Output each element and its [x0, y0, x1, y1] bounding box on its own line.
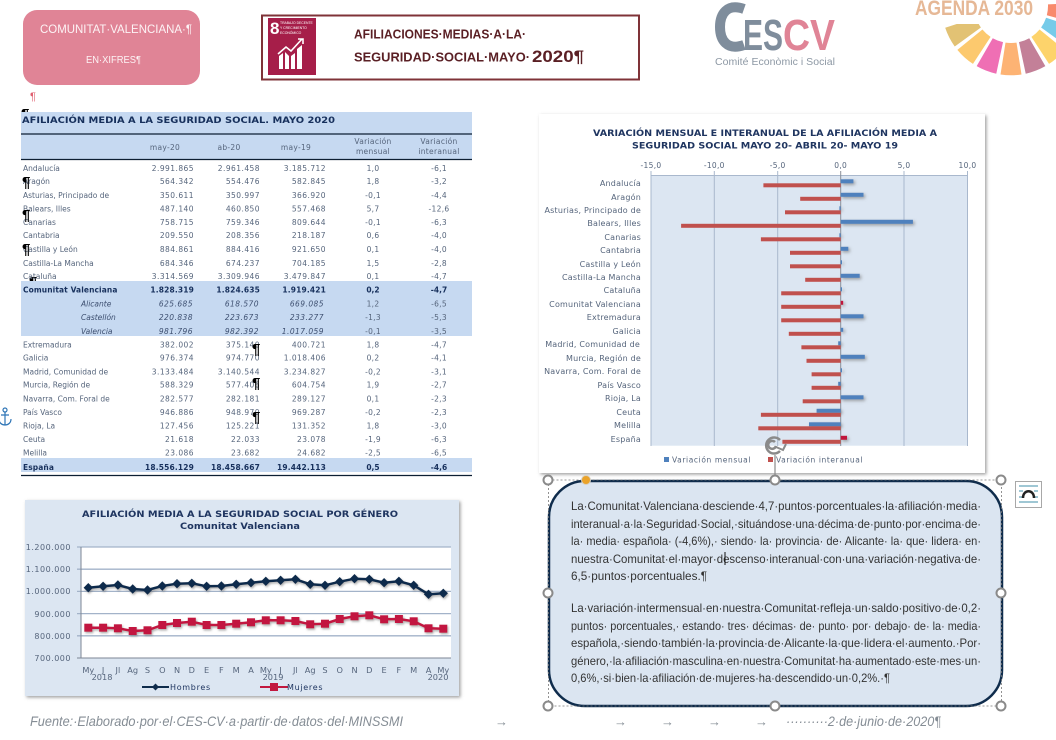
table rows: 24.682 [297, 448, 326, 458]
category labels: España [611, 435, 641, 444]
table rows: 218.187 [292, 231, 326, 240]
table header: interanual [418, 147, 460, 156]
table rows: 704.185 [292, 259, 326, 268]
formatting marks: ¶ [252, 375, 260, 392]
table rows: -0,1 [365, 218, 381, 227]
table rows: 557.468 [292, 204, 326, 214]
series: Hombres [88, 579, 443, 594]
footer date: → [614, 714, 627, 729]
title text: AFILIACIONES·MEDIAS·A·LA· [354, 26, 526, 42]
table rows: 884.416 [226, 245, 260, 254]
table rows: 208.356 [226, 231, 260, 240]
table rows: Navarra, Com. Foral de [23, 394, 110, 404]
table title: AFILIACIÓN MEDIA A LA SEGURIDAD SOCIAL. MAYO 2020 [22, 114, 335, 126]
icon: SDG 8 decent work: TRABAJO DECENTE [280, 21, 314, 25]
selection handles [544, 455, 1006, 710]
table rows: -6,1 [431, 164, 447, 173]
table rows: 884.861 [160, 245, 194, 254]
table rows: 460.850 [226, 204, 260, 214]
table rows: -1,9 [365, 435, 381, 444]
table rows: 0,2 [367, 354, 379, 362]
table rows: 3.140.544 [218, 368, 260, 376]
logo: CESCV [715, 7, 836, 68]
table rows: 131.352 [292, 422, 326, 430]
table rows: 0,5 [366, 463, 380, 472]
x axis labels: F [219, 665, 224, 675]
table rows: -4,1 [431, 354, 447, 362]
table rows: Madrid, Comunidad de [23, 368, 109, 376]
formatting marks under the table [21, 106, 37, 291]
series: Mujeres [88, 615, 443, 631]
legend: Hombres [170, 683, 211, 692]
table header: ab-20 [217, 143, 241, 152]
category labels: Cataluña [604, 286, 641, 295]
table rows: 684.346 [160, 259, 194, 268]
x axis labels: Jl [115, 665, 120, 675]
footer date: → [661, 714, 674, 729]
icon: anchor [0, 408, 11, 425]
icon: SDG 8 decent work: 8 [270, 19, 279, 38]
table rows: 23.078 [297, 435, 326, 444]
table rows: -3,0 [431, 422, 447, 430]
title text: SEGURIDAD·SOCIAL·MAYO· [354, 50, 530, 64]
table rows: Valencia [81, 327, 113, 336]
y axis labels: 900.000 [34, 610, 71, 619]
x axis labels: My [82, 665, 94, 675]
icon: SDG 8 decent work: ECONÓMICO [280, 30, 302, 35]
x axis labels: Jl [292, 665, 298, 675]
table rows: Castilla-La Mancha [23, 259, 94, 268]
legend [664, 456, 863, 464]
table rows: Asturias, Principado de [23, 191, 110, 200]
x axis labels: -5,0 [770, 161, 786, 170]
x axis labels: M [410, 665, 417, 675]
x axis labels: D [366, 665, 372, 675]
table rows: 1.017.059 [282, 327, 324, 336]
x axis labels: 2019 [263, 672, 283, 682]
footer date: → [755, 714, 768, 729]
table rows: 1,2 [367, 300, 379, 308]
table rows: 382.002 [160, 340, 194, 350]
table rows: 3.234.827 [284, 368, 326, 376]
x axis labels: J [101, 665, 104, 675]
table rows: -6,3 [431, 435, 447, 444]
table rows: 0,2 [366, 286, 380, 294]
paragraph 1: La·Comunitat·Valenciana·desciende·4,7·puntos·porcentuales·la·afiliación·media· [571, 499, 981, 513]
table header: may-20 [150, 143, 180, 152]
line chart: afiliación por género [25, 500, 459, 696]
table rows: 282.577 [160, 394, 194, 404]
table rows: Balears, Illes [23, 204, 71, 214]
table rows: -2,8 [431, 259, 447, 268]
category labels: Comunitat Valenciana [549, 300, 641, 309]
table rows: 23.086 [165, 448, 194, 458]
icon: rotate handle [766, 438, 786, 453]
paragraph 2: española,·siendo·también·la·provincia·de·Alicante·la·que·lidera·el·aumento.·Por· [571, 636, 981, 650]
table rows: -12,6 [429, 204, 449, 214]
x axis labels: J [278, 665, 282, 675]
table rows: Cataluña [23, 272, 57, 281]
badge: Comunitat Valenciana en xifres: COMUNITAT·VALENCIANA·¶ [40, 24, 192, 36]
chart title: Comunitat Valenciana [180, 522, 300, 532]
category labels: Madrid, Comunidad de [545, 340, 640, 349]
legend: Variación interanual [776, 456, 863, 464]
table rows: -4,7 [431, 272, 447, 281]
table rows: Extremadura [23, 340, 72, 350]
table rows: -3,1 [431, 368, 447, 376]
table rows: 289.127 [292, 394, 326, 404]
table rows: 0,1 [367, 394, 379, 404]
table rows: 18.458.667 [211, 463, 260, 472]
category labels: Cantabria [600, 246, 641, 255]
table rows: 577.406 [226, 380, 260, 390]
table rows: 554.476 [226, 177, 260, 186]
x axis labels: A [426, 665, 432, 675]
x axis labels: -10,0 [704, 161, 725, 170]
table rows: 3.185.712 [284, 164, 326, 173]
table rows: -1,3 [365, 313, 381, 322]
table rows: -0,1 [365, 327, 381, 336]
footer date: → [708, 714, 721, 729]
table rows: -4,0 [431, 245, 447, 254]
table rows: 588.329 [160, 380, 194, 390]
x axis labels: 5,0 [898, 161, 910, 170]
table rows: 1,8 [367, 177, 379, 186]
category labels: Extremadura [587, 313, 641, 322]
table rows: 1,0 [367, 164, 379, 173]
table rows: -2,3 [431, 394, 447, 404]
table rows: 366.920 [292, 191, 326, 200]
category labels [544, 179, 641, 444]
table rows: Melilla [23, 448, 47, 458]
table rows: 976.374 [160, 354, 194, 362]
table rows: 3.314.569 [152, 272, 194, 281]
x axis labels: E [204, 665, 209, 675]
table rows: 0,1 [367, 272, 379, 281]
x axis labels: F [397, 665, 402, 675]
x axis labels: E [382, 665, 387, 675]
table rows: 21.618 [165, 435, 194, 444]
table rows: 209.550 [160, 231, 194, 240]
table rows: 1,5 [367, 259, 379, 268]
table rows: Rioja, La [23, 422, 55, 430]
paragraph 1: la· media· española· (-4,6%),· siendo· la· provincia· de· Alicante· la· que· lidera· en· [571, 534, 981, 548]
table rows: -6,5 [431, 300, 447, 308]
table rows: 2.961.458 [218, 164, 260, 173]
table rows: 604.754 [292, 380, 326, 390]
table rows: 1,9 [367, 380, 379, 390]
table rows: 487.140 [160, 204, 194, 214]
x axis labels: 0,0 [834, 161, 847, 170]
formatting marks under the table: ¶ [21, 106, 29, 123]
table rows: -2,3 [431, 408, 447, 417]
table rows: 1,8 [367, 422, 379, 430]
footer date: ··········2·de·junio·de·2020¶ [786, 713, 941, 729]
table rows: Castilla y León [23, 245, 78, 254]
chart title [82, 508, 398, 532]
table rows: 22.033 [231, 435, 260, 444]
category labels: Navarra, Com. Foral de [544, 367, 641, 376]
x axis labels: O [336, 665, 343, 675]
table rows: 375.140 [226, 340, 260, 350]
table rows: 0,6 [367, 231, 379, 240]
table rows: 564.342 [160, 177, 194, 186]
table rows: -4,7 [431, 340, 447, 350]
table rows: -4,0 [431, 231, 447, 240]
table rows: 233.277 [290, 313, 324, 322]
formatting marks: ¶ [22, 207, 30, 224]
x axis labels: 2020 [428, 672, 448, 682]
table rows: 400.721 [292, 340, 326, 350]
table rows: -2,7 [431, 380, 447, 390]
chart title: VARIACIÓN MENSUAL E INTERANUAL DE LA AFILIACIÓN MEDIA A [593, 127, 937, 139]
x axis labels: O [159, 665, 166, 675]
table rows: 3.479.847 [284, 272, 326, 281]
y axis labels: 1.200.000 [26, 543, 71, 552]
category labels: Andalucía [600, 179, 641, 188]
table rows: Andalucía [23, 164, 60, 173]
title text [354, 26, 584, 66]
y axis labels: 1.000.000 [26, 587, 71, 596]
table rows: 809.644 [292, 218, 326, 227]
icon: SDG 8 decent work [268, 18, 316, 75]
table rows: 23.682 [231, 448, 260, 458]
footer source: Fuente:·Elaborado·por·el·CES-CV·a·partir·de·datos·del·MINSSMI [30, 713, 403, 729]
table rows: Canarias [23, 218, 56, 227]
bars: variación mensual [809, 179, 913, 440]
table rows: 618.570 [225, 300, 259, 308]
title box [262, 16, 639, 80]
formatting marks: ¶ [22, 174, 30, 191]
logo: Agenda 2030 [915, 0, 1056, 75]
table rows: -3,2 [431, 177, 447, 186]
formatting marks: ¶ [252, 341, 260, 358]
table rows: -0,1 [365, 191, 381, 200]
category labels: Ceuta [616, 408, 641, 417]
table header: mensual [356, 147, 390, 156]
paragraph 1: interanual·a·la·Seguridad·Social,·situándose·una·décima·de·punto·por·encima·de· [571, 517, 981, 531]
table rows: 282.181 [226, 394, 260, 404]
category labels: Murcia, Región de [566, 353, 641, 363]
table rows: 125.221 [226, 422, 260, 430]
x axis labels: S [322, 665, 328, 675]
table rows: 625.685 [159, 300, 193, 308]
table header: may-19 [281, 143, 311, 152]
x axis labels: N [351, 665, 358, 675]
title text: 2020¶ [532, 48, 584, 66]
formatting marks: ¶ [252, 409, 260, 426]
footer date [495, 713, 941, 729]
table rows: Castellón [81, 313, 116, 322]
table rows: 350.997 [226, 191, 260, 200]
table rows: 758.715 [160, 218, 194, 227]
paragraph 1: 6,5·puntos·porcentuales.¶ [571, 569, 707, 583]
paragraph 2: género,·la·afiliación·masculina·en·nuestra·Comunitat·ha·aumentado·este·mes·un· [571, 654, 981, 668]
table rows: -6,3 [431, 218, 447, 227]
table rows: -3,5 [431, 327, 447, 336]
table rows: 3.309.946 [218, 272, 260, 281]
table rows: 3.133.484 [152, 368, 194, 376]
table rows: -2,5 [365, 448, 381, 458]
x axis labels: M [233, 665, 240, 675]
paragraph 1 [571, 499, 981, 583]
table rows: 350.611 [160, 191, 194, 200]
table header [150, 137, 460, 156]
chart title [593, 127, 937, 152]
category labels: Aragón [611, 192, 641, 202]
chart title: AFILIACIÓN MEDIA A LA SEGURIDAD SOCIAL POR GÉNERO [82, 508, 398, 520]
formatting marks: ¶ [30, 91, 36, 103]
paragraph 1: nuestra·Comunitat·el·mayor·descenso·interanual·con·una·variación·negativa·de· [571, 552, 981, 566]
badge: Comunitat Valenciana en xifres [23, 10, 200, 85]
table rows: Aragón [23, 177, 50, 186]
category labels: Melilla [614, 421, 641, 430]
table rows: -0,2 [365, 408, 381, 417]
table rows: 669.085 [290, 300, 324, 308]
table rows: -4,7 [431, 286, 447, 294]
formatting marks [22, 91, 260, 426]
text panel: commentary [548, 480, 1002, 706]
x axis labels: Ag [305, 665, 316, 675]
legend: Mujeres [287, 683, 323, 692]
x axis labels: D [189, 665, 195, 675]
table rows: 1.919.421 [282, 286, 326, 294]
table rows [23, 164, 449, 472]
table rows: 1.824.635 [216, 286, 260, 294]
logo: CESCV: ES [743, 11, 783, 60]
category labels: País Vasco [597, 381, 641, 390]
table rows: 1.018.406 [284, 354, 326, 362]
table rows: 974.770 [226, 354, 260, 362]
table rows: 582.845 [292, 177, 326, 186]
y axis labels: 700.000 [34, 654, 71, 663]
category labels: Asturias, Principado de [544, 206, 641, 215]
formatting marks: ¶ [22, 241, 30, 258]
x axis labels [641, 161, 976, 170]
table rows: España [23, 463, 54, 472]
table rows: -6,5 [431, 448, 447, 458]
table rows: 127.456 [160, 422, 194, 430]
table rows: -4,6 [431, 463, 447, 472]
logo: CESCV: Comité Econòmic i Social [715, 56, 835, 68]
table rows: Comunitat Valenciana [23, 286, 118, 294]
icon: SDG 8 decent work: Y CRECIMIENTO [280, 26, 307, 30]
legend [142, 683, 323, 692]
table rows: Alicante [80, 300, 112, 308]
table rows: 5,7 [367, 204, 379, 214]
table rows: -4,4 [431, 191, 447, 200]
table rows: 0,1 [367, 245, 379, 254]
table rows: -0,2 [365, 368, 381, 376]
table rows: País Vasco [23, 408, 62, 417]
logo: CESCV: CV [783, 11, 836, 60]
paragraph 2: puntos· porcentuales,· estando· tres· décimas· de· punto· por· debajo· de· la· media· [571, 619, 981, 633]
plot area [651, 176, 968, 446]
formatting marks under the table: ¶ [29, 274, 37, 291]
table rows: -5,3 [431, 313, 447, 322]
category labels: Balears, Illes [587, 219, 641, 228]
bars: variación interanual [681, 183, 841, 444]
x axis labels: Ag [127, 665, 138, 675]
table header: Variación [354, 137, 392, 146]
x axis labels [82, 665, 449, 682]
table rows: Ceuta [23, 435, 45, 444]
category labels: Galicia [613, 327, 641, 336]
legend: Variación mensual [672, 456, 751, 464]
category labels: Castilla y León [580, 259, 641, 269]
category labels: Castilla-La Mancha [562, 273, 641, 282]
x axis labels: N [174, 665, 180, 675]
category labels: Rioja, La [605, 394, 641, 403]
table rows: 969.287 [292, 408, 326, 417]
x axis labels: My [437, 665, 449, 675]
table rows: Cantabria [23, 231, 60, 240]
x axis labels: 2018 [92, 672, 112, 682]
paragraph 2 [571, 601, 981, 685]
table rows: 946.886 [160, 408, 194, 417]
table rows: 220.838 [159, 313, 193, 322]
table rows: 674.237 [226, 259, 260, 268]
y axis labels: 1.100.000 [26, 565, 71, 574]
table rows: 759.346 [226, 218, 260, 227]
bar chart: variación mensual e interanual [539, 114, 985, 473]
table header: Variación [420, 137, 458, 146]
table rows: 223.673 [225, 313, 259, 322]
table rows: 18.556.129 [145, 463, 194, 472]
table rows: 948.970 [226, 408, 260, 417]
x axis labels: My [260, 665, 272, 675]
x axis labels: 10,0 [959, 161, 976, 170]
table rows: Murcia, Región de [23, 380, 91, 390]
table rows: 2.991.865 [152, 164, 194, 173]
category labels: Canarias [604, 233, 641, 242]
badge: Comunitat Valenciana en xifres: EN·XIFRES¶ [86, 54, 141, 66]
table rows: 981.796 [159, 327, 193, 336]
table rows: 982.392 [225, 327, 259, 336]
table rows: 921.650 [292, 245, 326, 254]
icon: layout options [1016, 482, 1042, 508]
y axis labels: 800.000 [34, 632, 71, 641]
x axis labels: A [248, 665, 254, 675]
footer date: → [495, 714, 508, 729]
table rows: 1.828.319 [150, 286, 194, 294]
table rows: Galicia [23, 354, 48, 362]
x axis labels: S [145, 665, 150, 675]
table: afiliación media [21, 112, 472, 476]
chart title: SEGURIDAD SOCIAL MAYO 20- ABRIL 20- MAYO 19 [632, 142, 898, 152]
x axis labels: -15,0 [641, 161, 661, 170]
paragraph 2: La·variación·intermensual·en·nuestra·Comunitat·refleja·un·saldo·positivo·de·0,2· [571, 601, 981, 615]
table rows: 1,8 [367, 340, 379, 350]
y axis labels [26, 543, 71, 663]
table rows: 19.442.113 [277, 463, 326, 472]
plot area [81, 547, 451, 658]
paragraph 2: 0,6%,·si·bien·la·afiliación·de·mujeres·ha·descendido·un·0,2%.·¶ [571, 671, 890, 685]
